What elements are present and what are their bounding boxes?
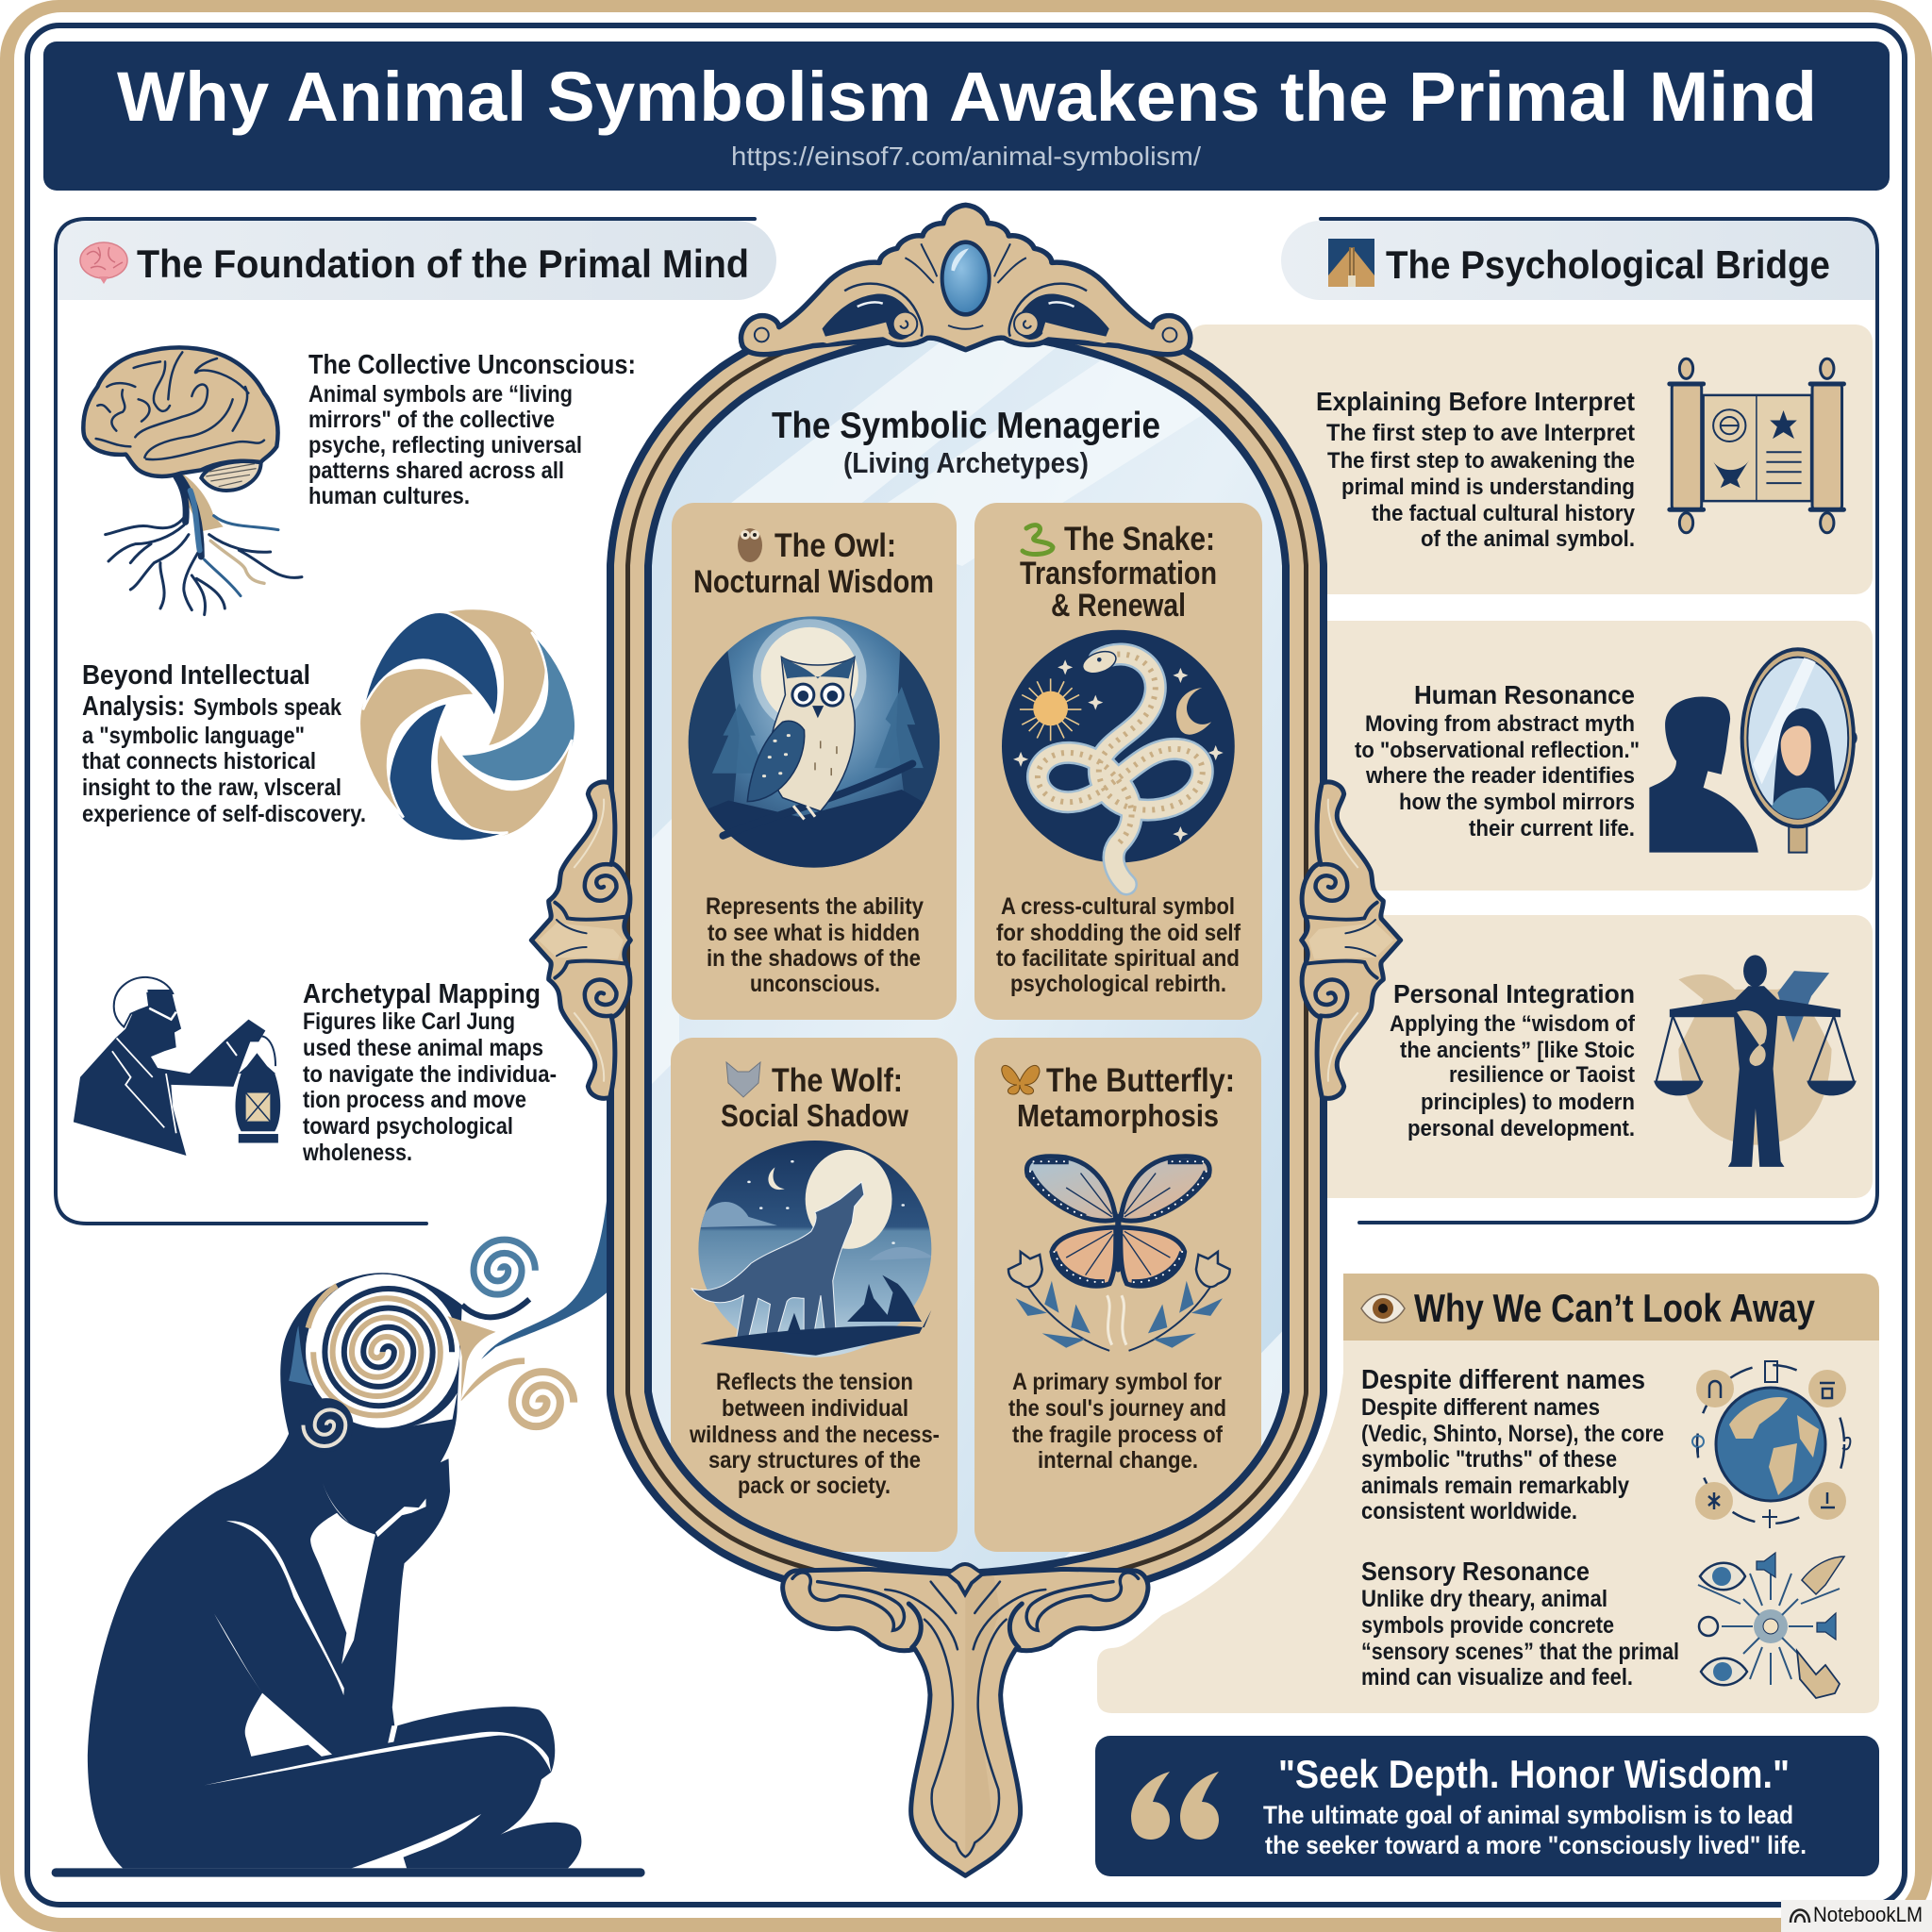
panel heading text: The Foundation of the Primal Mind (137, 242, 749, 286)
source url: https://einsof7.com/animal-symbolism/ (731, 142, 1201, 171)
text block (1390, 979, 1636, 1141)
card body: Represents the ability (706, 893, 924, 920)
text block: the collective unconscious: Animal symbols are “living (308, 381, 573, 408)
card: explaining before interpret (1189, 325, 1873, 594)
text block: Applying the “wisdom of (1390, 1011, 1636, 1037)
panel: the psychological bridge (1189, 219, 1877, 1223)
text block: despite different names: animals remain remarkably (1361, 1473, 1629, 1499)
card body: sary structures of the (708, 1447, 921, 1474)
mirror frame (652, 338, 1282, 1570)
text block: primal mind is understanding (1341, 475, 1635, 500)
card heading: The Owl: (774, 527, 896, 564)
text block: personal development. (1407, 1116, 1635, 1141)
card heading: & Renewal (1051, 588, 1186, 624)
left scroll detail (755, 243, 937, 343)
card body (689, 1369, 940, 1499)
illustration: owl on branch in moonlit forest (689, 616, 940, 871)
text block: Human Resonance (1414, 680, 1635, 709)
panel: the foundation of the primal mind (56, 219, 776, 1224)
card body: A cress-cultural symbol (1001, 893, 1235, 920)
text block: beyond intellectual analysis: Symbols speak (193, 694, 341, 721)
text block: archetypal mapping: wholeness. (302, 1140, 412, 1166)
icon: brain with roots (83, 347, 302, 615)
card heading (1020, 521, 1217, 624)
text block: how the symbol mirrors (1399, 790, 1635, 815)
text block: principles) to modern (1421, 1090, 1635, 1115)
mirror handle (783, 1569, 1148, 1875)
icon: bridge (1328, 239, 1374, 287)
panel heading: The Symbolic Menagerie (772, 406, 1160, 446)
text block: the collective unconscious: mirrors" of the collective (308, 407, 555, 433)
panel heading: (Living Archetypes) (843, 446, 1089, 479)
icon: small butterfly (1002, 1065, 1040, 1094)
text block: archetypal mapping: used these animal maps (303, 1035, 543, 1061)
card body: the fragile process of (1012, 1422, 1224, 1448)
illustration: thinking figure with spirals (52, 1193, 645, 1877)
handle collar bump (947, 1564, 983, 1594)
card heading (721, 1062, 908, 1133)
text block: beyond intellectual analysis (82, 660, 366, 827)
text block: beyond intellectual analysis: Analysis: (82, 691, 185, 722)
panel: symbolic menagerie (671, 406, 1262, 1552)
card body: for shodding the oid self (996, 920, 1241, 946)
text block: archetypal mapping: toward psychological (303, 1113, 513, 1140)
lantern (235, 1036, 280, 1143)
text block: beyond intellectual analysis: insight to the raw, vlsceral (82, 774, 341, 801)
text block: despite different names: symbolic "truths" of these (1361, 1446, 1617, 1473)
card heading: Metamorphosis (1017, 1098, 1219, 1133)
text block: despite different names (1361, 1365, 1664, 1524)
illustration: snake with sun and moon (1002, 630, 1235, 884)
text block: archetypal mapping: Archetypal Mapping (303, 979, 541, 1009)
card body: the soul's journey and (1008, 1395, 1226, 1422)
card body: to facilitate spiritual and (996, 945, 1240, 972)
icon: eye (1361, 1294, 1405, 1323)
card: the owl (672, 503, 957, 1020)
text block: their current life. (1469, 816, 1635, 841)
panel heading pill (58, 221, 776, 300)
tan spiral (512, 1372, 574, 1426)
text block: archetypal mapping: tion process and move (303, 1087, 526, 1113)
white cut lines (205, 1479, 551, 1868)
quote text: The ultimate goal of animal symbolism is to lead (1263, 1801, 1793, 1829)
text block: resilience or Taoist (1449, 1062, 1635, 1088)
card body: wildness and the necess- (689, 1422, 940, 1448)
title banner (43, 42, 1890, 191)
text block: sensory resonance: “sensory scenes” that the primal (1361, 1639, 1679, 1665)
text block: beyond intellectual analysis: a "symbolic language" (82, 723, 305, 749)
badge icon (1790, 1909, 1809, 1923)
figure silhouette (88, 1273, 581, 1868)
card body: psychological rebirth. (1010, 971, 1226, 997)
card heading: The Snake: (1064, 521, 1215, 558)
panel heading bar (1343, 1274, 1879, 1341)
card body: Reflects the tension (716, 1369, 913, 1395)
icon: sensory starburst (1698, 1553, 1844, 1698)
text block: of the animal symbol. (1421, 526, 1635, 552)
panel heading (772, 406, 1160, 479)
mirror glass (641, 330, 1292, 1575)
text block: the collective unconscious: The Collective Unconscious: (308, 350, 636, 380)
text block: the collective unconscious: psyche, reflecting universal (308, 432, 582, 458)
right side ornament (1302, 782, 1401, 1098)
icon: globe with sacred symbols (1692, 1361, 1850, 1528)
quote text: the seeker toward a more "consciously lived" life. (1265, 1831, 1807, 1859)
mirror crown ornament (741, 205, 1191, 355)
card body: in the shadows of the (707, 945, 921, 972)
icon: pink brain (80, 242, 127, 284)
text block (1316, 387, 1636, 552)
icon: small owl (738, 528, 762, 562)
card heading: Nocturnal Wisdom (693, 564, 934, 600)
icon: Jung with lantern (74, 977, 280, 1156)
head spirals (289, 1274, 529, 1428)
text block: sensory resonance: Unlike dry theary, animal (1361, 1586, 1607, 1612)
text block: despite different names: Despite different names (1361, 1394, 1600, 1421)
card body: internal change. (1038, 1447, 1198, 1474)
panel heading pill (1281, 221, 1875, 300)
icon: balanced figure with scales (1654, 955, 1857, 1167)
panel heading text: The Psychological Bridge (1386, 242, 1830, 287)
text block (1355, 680, 1640, 841)
card heading (1017, 1062, 1235, 1133)
card: human resonance (1302, 621, 1873, 891)
text block: Moving from abstract myth (1365, 711, 1635, 737)
text block: the collective unconscious: human cultures. (308, 483, 470, 509)
text block: Personal Integration (1393, 979, 1635, 1008)
text block: the collective unconscious (308, 350, 636, 509)
card body (996, 893, 1241, 997)
text block: the ancients” [like Stoic (1400, 1038, 1635, 1063)
text block: beyond intellectual analysis: that connects historical (82, 748, 316, 774)
text block: archetypal mapping: Figures like Carl Jung (303, 1008, 515, 1035)
text block: the collective unconscious: patterns shared across all (308, 458, 564, 484)
card body: pack or society. (738, 1473, 891, 1499)
quote banner (1095, 1736, 1879, 1876)
card heading: Social Shadow (721, 1098, 908, 1133)
text block: beyond intellectual analysis: Beyond Intellectual (82, 660, 310, 691)
icon: scroll (1670, 358, 1843, 533)
left side ornament (531, 782, 630, 1098)
text block: sensory resonance: Sensory Resonance (1361, 1557, 1590, 1586)
card body: A primary symbol for (1012, 1369, 1222, 1395)
text block: beyond intellectual analysis: experience of self-discovery. (82, 801, 366, 827)
text block: archetypal mapping: to navigate the individua- (303, 1061, 557, 1088)
text block: Explaining Before Interpret (1316, 387, 1635, 416)
text block: despite different names: consistent worldwide. (1361, 1498, 1577, 1524)
card body (706, 893, 924, 997)
text block: the factual cultural history (1372, 501, 1636, 526)
text block: where the reader identifies (1365, 763, 1635, 789)
icon: small wolf (726, 1062, 760, 1097)
text block: The first step to ave Interpret (1326, 420, 1636, 446)
quote heading: "Seek Depth. Honor Wisdom." (1278, 1752, 1790, 1796)
icon: person facing mirror (1649, 649, 1857, 853)
illustration: ornate hand mirror (531, 205, 1401, 1875)
card: the butterfly (974, 1038, 1261, 1552)
text block: sensory resonance: mind can visualize and feel. (1361, 1664, 1633, 1690)
card body: unconscious. (750, 971, 880, 997)
ground line (52, 1868, 645, 1877)
text block: The first step to awakening the (1327, 448, 1635, 474)
swoosh to mirror (481, 1193, 621, 1359)
card heading (693, 527, 934, 600)
blue spiral (474, 1240, 535, 1294)
illustration: butterfly with flowers (1008, 1157, 1230, 1351)
text block: despite different names: Despite different names (1361, 1365, 1645, 1395)
small spiral on head (299, 1398, 353, 1452)
NotebookLM badge (1781, 1900, 1932, 1932)
panel: why we can't look away (1097, 1274, 1879, 1713)
mirror inner rim (652, 338, 1282, 1570)
card heading: Transformation (1020, 556, 1217, 591)
card: the wolf (671, 1038, 958, 1552)
card body (1008, 1369, 1226, 1474)
right scroll detail (994, 243, 1176, 343)
text block: archetypal mapping (302, 979, 557, 1166)
card body: to see what is hidden (708, 920, 920, 946)
gem (941, 240, 991, 317)
card: personal integration (1302, 915, 1873, 1198)
quote mark (1131, 1772, 1219, 1840)
card: the snake (974, 503, 1262, 1020)
text block: to "observational reflection." (1355, 738, 1640, 763)
card body: between individual (722, 1395, 908, 1422)
title: Why Animal Symbolism Awakens the Primal Mind (117, 58, 1817, 136)
quote text (1263, 1801, 1807, 1859)
icon: swirl (327, 568, 608, 881)
badge text: NotebookLM (1813, 1903, 1923, 1926)
text block: despite different names: (Vedic, Shinto, Norse), the core (1361, 1421, 1664, 1447)
text block: sensory resonance: symbols provide concrete (1361, 1612, 1614, 1639)
illustration: wolf howling at moon (691, 1139, 936, 1359)
panel heading text: Why We Can’t Look Away (1414, 1286, 1816, 1330)
text block: sensory resonance (1361, 1557, 1679, 1690)
icon: small snake (1023, 525, 1053, 554)
card heading: The Butterfly: (1046, 1062, 1235, 1099)
card heading: The Wolf: (772, 1062, 903, 1099)
